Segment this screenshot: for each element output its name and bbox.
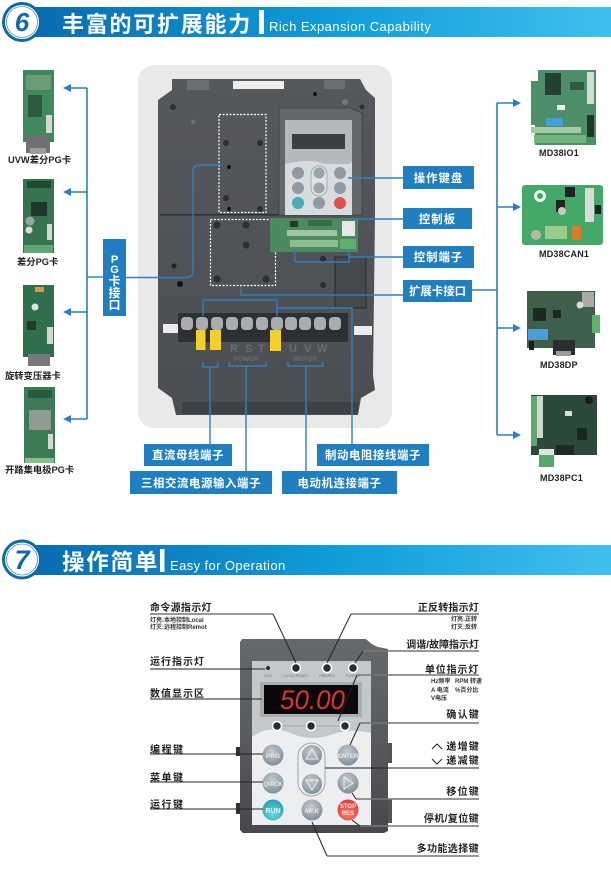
label: three phase input: 三相交流电源输入端子 xyxy=(141,476,261,490)
card: resolver: 旋转变压器卡 xyxy=(5,370,61,381)
left keypad labels: 数值显示区 xyxy=(150,687,205,700)
panel: device photo xyxy=(138,65,392,428)
unit notes: RPM 转速 xyxy=(455,677,482,685)
indicators: TUNE/TC xyxy=(345,674,361,678)
label: PG card interface xyxy=(103,239,126,316)
terminal block: UVW xyxy=(289,343,328,355)
keypad on device xyxy=(279,108,362,215)
card: MD38CAN1: MD38CAN1 xyxy=(539,249,589,259)
card: MD38IO1 xyxy=(531,70,596,158)
card: resolver xyxy=(5,285,61,381)
display xyxy=(260,682,362,717)
right keypad labels: 移位键 xyxy=(446,785,480,798)
badge 7 xyxy=(2,540,42,580)
label: brake resistor: 制动电阻接线端子 xyxy=(325,448,421,462)
left keypad labels: 编程键 xyxy=(150,743,184,756)
indicators: FWD/REV xyxy=(319,674,336,678)
label: DC bus: 直流母线端子 xyxy=(152,448,224,462)
label: control terminal: 控制端子 xyxy=(414,250,463,264)
indicators: LOCAL/REMOT xyxy=(283,674,309,678)
label: control terminal xyxy=(403,246,474,268)
label: brake resistor xyxy=(317,444,429,466)
card: UVW differential PG: UVW差分PG卡 xyxy=(8,154,71,165)
label: keypad xyxy=(403,166,474,189)
right keypad labels: 正反转指示灯 xyxy=(418,601,479,614)
card: differential PG: 差分PG卡 xyxy=(17,256,58,267)
badge 7: 7 xyxy=(14,545,31,575)
indicators xyxy=(264,664,361,730)
label: PG card interface: 接 xyxy=(108,285,121,300)
heading 7: 操作简单 xyxy=(62,550,159,575)
left keypad labels: 运行指示灯 xyxy=(150,655,205,668)
label: control board xyxy=(403,208,472,229)
label: PG card interface: G xyxy=(110,264,119,276)
badge 6: 6 xyxy=(15,7,30,37)
label: DC bus xyxy=(144,444,232,466)
left keypad labels: 灯灭:远程控制Remot xyxy=(150,623,207,631)
left keypad labels xyxy=(150,601,212,811)
callout lines: keypad xyxy=(150,614,479,856)
terminal block: MOTOR xyxy=(293,356,317,363)
unit notes: A 电流 xyxy=(431,686,449,694)
buttons: STOP xyxy=(340,804,356,810)
dashed slot: PG card xyxy=(219,114,266,212)
display: 50.00 xyxy=(280,685,345,715)
buttons: QUICK xyxy=(263,782,283,788)
buttons: RES xyxy=(342,811,354,817)
label: expansion interface: 扩展卡接口 xyxy=(409,284,466,298)
card: open collector PG: 开路集电极PG卡 xyxy=(5,464,74,475)
buttons xyxy=(262,743,359,820)
left keypad labels: 运行键 xyxy=(150,798,184,811)
heading 6: 丰富的可扩展能力 xyxy=(62,12,252,37)
buttons: RUN xyxy=(265,808,281,815)
label: motor xyxy=(282,471,397,494)
label: PG card interface: P xyxy=(111,254,118,266)
label: keypad: 操作键盘 xyxy=(414,171,463,185)
card: differential PG xyxy=(17,179,58,267)
control board xyxy=(270,218,358,252)
label: PG card interface: 口 xyxy=(108,298,121,312)
label: expansion interface xyxy=(403,280,472,302)
unit notes xyxy=(431,677,482,702)
badge 6 xyxy=(2,2,42,42)
label: three phase input xyxy=(130,471,272,494)
english heading 6: Rich Expansion Capability xyxy=(269,19,431,34)
connector lines: device xyxy=(87,165,497,471)
right keypad labels: 多功能选择键 xyxy=(417,842,479,855)
right keypad labels xyxy=(406,601,480,855)
card: MD38DP xyxy=(527,291,600,370)
icon: up down chevrons xyxy=(432,744,442,764)
label: PG card interface: 卡 xyxy=(108,273,121,288)
card: MD38PC1 xyxy=(531,395,597,483)
dashed slot: expansion card xyxy=(210,220,276,286)
card: MD38DP: MD38DP xyxy=(540,360,578,370)
unit notes: V电压 xyxy=(431,694,447,702)
right keypad labels: 确认键 xyxy=(446,708,480,721)
card: MD38CAN1 xyxy=(522,185,603,259)
section header 7 xyxy=(2,540,611,580)
left keypad labels: 菜单键 xyxy=(150,771,184,784)
keypad illustration xyxy=(236,639,392,833)
indicators: RUN xyxy=(264,674,272,678)
card: MD38IO1: MD38IO1 xyxy=(539,148,579,158)
card: MD38PC1: MD38PC1 xyxy=(540,473,583,483)
card: open collector PG xyxy=(5,387,74,475)
buttons: ENTER xyxy=(338,754,359,760)
right keypad labels: 递增键 xyxy=(446,740,480,753)
arrows: PG tree xyxy=(63,84,87,423)
right keypad labels: 灯灭:反转 xyxy=(451,623,477,631)
unit notes: %百分比 xyxy=(455,686,478,694)
terminal block xyxy=(163,313,372,363)
english heading 7: Easy for Operation xyxy=(170,558,286,573)
label: motor: 电动机连接端子 xyxy=(298,476,381,490)
unit notes: Hz频率 xyxy=(431,677,450,685)
right keypad labels: 调谐/故障指示灯 xyxy=(406,638,479,651)
terminal block: POWER xyxy=(234,356,259,363)
right keypad labels: 递减键 xyxy=(446,754,480,767)
right keypad labels: 灯亮:正转 xyxy=(451,615,477,623)
right keypad labels: 停机/复位键 xyxy=(424,812,479,825)
device body xyxy=(158,79,375,415)
section header 6 xyxy=(2,2,611,42)
buttons: PRG xyxy=(266,753,280,760)
card: UVW differential PG xyxy=(8,70,71,165)
left keypad labels: 命令源指示灯 xyxy=(150,601,212,614)
right keypad labels: 单位指示灯 xyxy=(425,663,479,676)
left keypad labels: 灯亮:本地控制Local xyxy=(150,616,204,624)
buttons: MF.K xyxy=(305,809,320,815)
arrows: expansion tree xyxy=(497,99,521,439)
terminal block: RST xyxy=(230,343,265,355)
label: control board: 控制板 xyxy=(419,212,456,226)
